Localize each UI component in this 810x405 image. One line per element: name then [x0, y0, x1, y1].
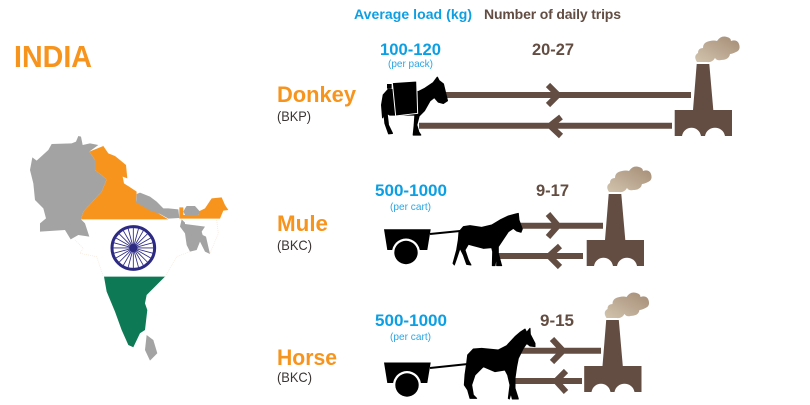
- horse load unit: (per cart): [390, 331, 431, 343]
- column header: average load: Average load (kg): [354, 6, 472, 22]
- icon: factory 3: [584, 292, 649, 392]
- icon: mule cart: [384, 229, 460, 266]
- region: Sri Lanka: [145, 335, 157, 361]
- mule trips: 9-17: [536, 182, 569, 200]
- region: Afghanistan and Pakistan: [30, 136, 107, 239]
- icon: factory 1: [675, 36, 740, 136]
- arrows: donkey: [419, 85, 691, 136]
- title: INDIA: [14, 39, 92, 74]
- label: Mule: Mule: [277, 211, 328, 236]
- icon: horse: [464, 328, 535, 399]
- flag: green band: [104, 277, 165, 347]
- regions: Nepal, Bhutan, Bangladesh: [136, 193, 210, 254]
- flag: saffron band west: [81, 146, 168, 219]
- label: Horse: Horse: [277, 345, 337, 370]
- horse load value: 500-1000: [375, 312, 447, 330]
- label: Donkey: Donkey: [277, 82, 357, 107]
- map of India with flag: [30, 136, 228, 361]
- Ashoka Chakra: [112, 227, 155, 269]
- icon: donkey with pack: [382, 77, 447, 135]
- icon: horse cart: [384, 362, 468, 399]
- donkey trips: 20-27: [532, 41, 574, 59]
- flag: white band outline: [75, 220, 218, 277]
- donkey load value: 100-120: [380, 41, 441, 59]
- horse trips: 9-15: [540, 312, 574, 330]
- label: BKC horse: (BKC): [277, 369, 312, 385]
- arrows: horse: [512, 339, 601, 392]
- mule load unit: (per cart): [390, 201, 431, 213]
- mule load value: 500-1000: [375, 182, 447, 200]
- column header: daily trips: Number of daily trips: [484, 6, 621, 22]
- arrows: mule: [495, 214, 603, 267]
- label: BKP: (BKP): [277, 108, 311, 124]
- donkey load unit: (per pack): [388, 58, 433, 70]
- icon: mule: [453, 213, 522, 266]
- flag: saffron band east: [179, 197, 228, 219]
- label: BKC mule: (BKC): [277, 237, 312, 253]
- icon: factory 2: [587, 166, 652, 266]
